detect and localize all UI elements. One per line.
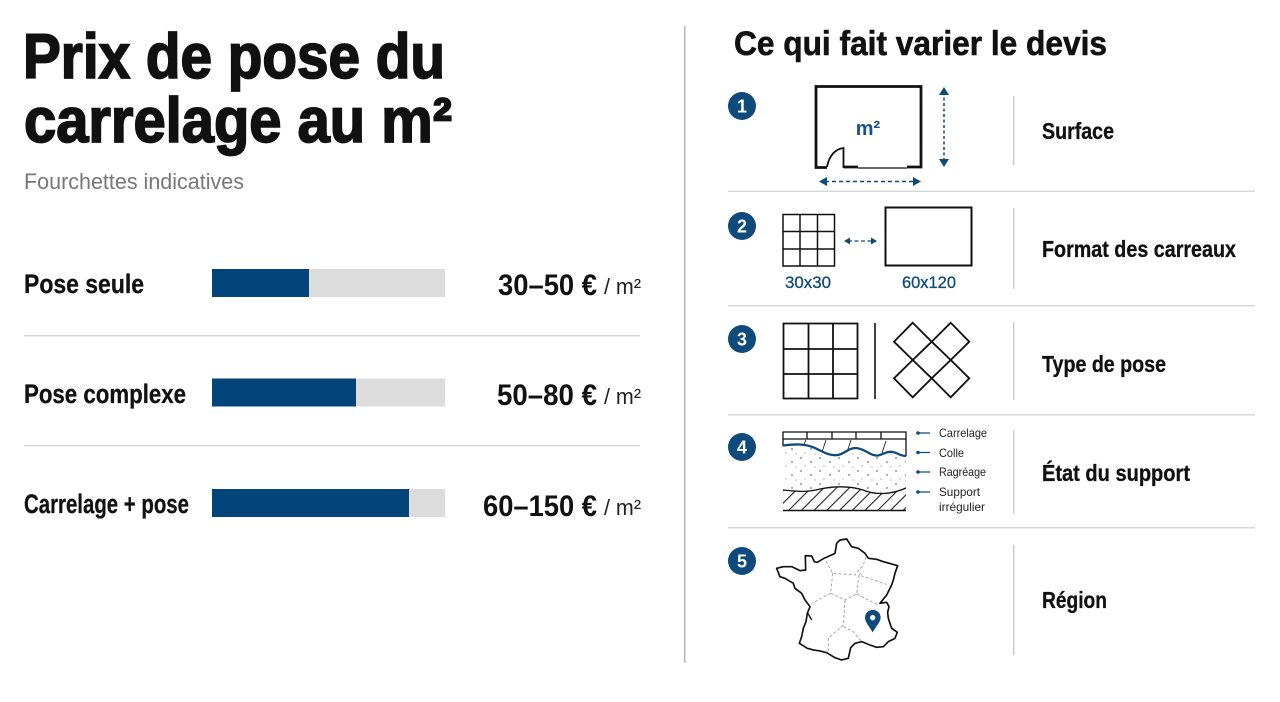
label: surface: Surface [1042,118,1114,144]
factor 2: format [728,208,1236,292]
icon: laying patterns [784,323,969,399]
factor 2: format: 30x30 [785,273,831,292]
title [23,22,452,156]
badge 5: 5 [737,552,747,572]
row: pose complexe [24,378,641,412]
factor 1: surface [728,86,1114,186]
icon: map of France [777,539,898,660]
factor 4: support [728,426,1190,514]
label: format: Format des carreaux [1042,236,1236,262]
layer legend: Support [939,485,981,499]
right heading: Ce qui fait varier le devis [734,25,1107,63]
title: Prix de pose du [23,22,445,92]
layer legend [916,426,987,514]
factor 2: format: 60x120 [902,273,956,292]
row: carrelage + pose [24,489,641,523]
icon: floor layers [783,432,906,510]
layer legend: Carrelage [939,426,987,440]
label: type de pose: Type de pose [1042,351,1166,377]
icon: room plan: m² [856,118,881,140]
factor 3: type de pose [728,322,1166,400]
icon: room plan [816,86,949,186]
layer legend: Ragréage [939,465,986,479]
layer legend: Colle [939,446,964,460]
label: etat du support: État du support [1042,459,1190,486]
row: pose seule [24,269,641,302]
row: carrelage + pose: 60–150 € [483,490,597,523]
badge 1: 1 [737,96,747,116]
subtitle: Fourchettes indicatives [24,169,244,194]
row: carrelage + pose: Carrelage + pose [24,489,189,519]
row: pose complexe: 50–80 € [497,379,597,412]
row: pose complexe: Pose complexe [24,379,186,409]
row: carrelage + pose: / m² [604,495,641,520]
layer legend: irrégulier [939,500,985,514]
badge 4: 4 [737,438,747,458]
badge 2: 2 [737,216,747,236]
badge 2 [728,212,756,240]
icon: tile formats [783,208,972,266]
row: pose complexe: / m² [604,384,641,409]
badge 4 [728,433,756,461]
label: region: Région [1042,587,1107,613]
badge 1 [728,92,756,120]
row: pose seule: 30–50 € [498,269,597,302]
factor 5: region [728,539,1107,660]
title: carrelage au m² [24,86,452,156]
row: pose seule: / m² [604,274,641,299]
row: pose seule: Pose seule [24,269,144,299]
badge 5 [728,547,756,575]
badge 3: 3 [737,330,747,350]
badge 3 [728,325,756,353]
